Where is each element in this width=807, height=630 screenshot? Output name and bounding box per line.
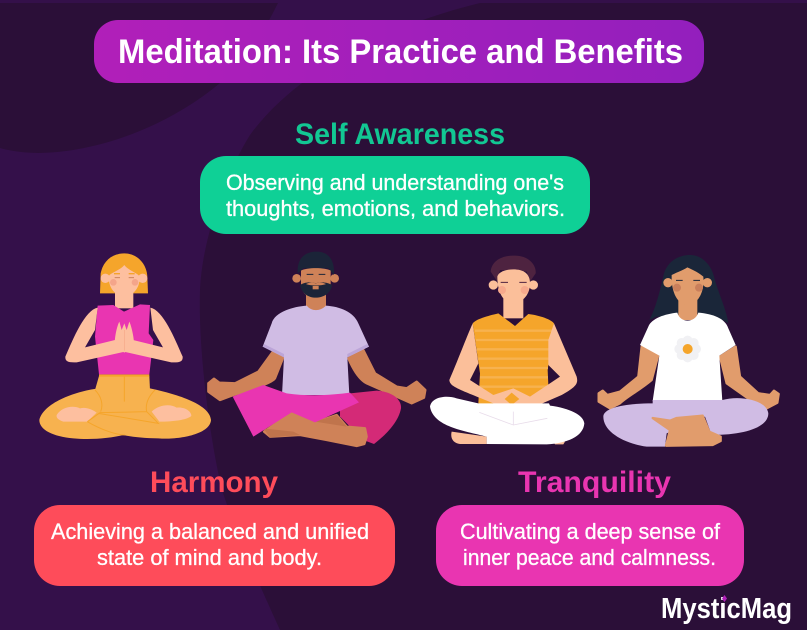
panel: harmony: [34, 466, 395, 586]
text block: harmony description: [34, 505, 395, 586]
heading: harmony: Harmony: [150, 466, 278, 499]
text block: harmony description: Achieving a balanced and unified: [51, 519, 369, 544]
title banner: Meditation: Its Practice and Benefits: [118, 33, 683, 71]
text block: tranquility description: inner peace and calmness.: [463, 545, 716, 570]
figure: dark-haired woman in white flower shirt: [599, 255, 779, 447]
panel: tranquility: [436, 466, 744, 586]
text block: tranquility description: [436, 505, 744, 586]
text block: self awareness description: [200, 156, 590, 234]
figure: man in orange striped vest: [430, 256, 584, 444]
text block: self awareness description: thoughts, emotions, and behaviors.: [226, 196, 565, 221]
panel: self awareness: [200, 118, 590, 234]
text block: harmony description: state of mind and body.: [97, 545, 322, 570]
figure: blonde woman with palms together: [39, 253, 211, 439]
title banner: [94, 20, 704, 83]
heading: self awareness: Self Awareness: [295, 118, 505, 151]
text block: tranquility description: Cultivating a deep sense of: [460, 519, 721, 544]
text block: self awareness description: Observing and understanding one's: [226, 170, 564, 195]
heading: tranquility: Tranquility: [518, 466, 671, 499]
logo: MysticMag: MysticMag: [661, 593, 792, 625]
figure: bearded man in lavender shirt: [208, 252, 425, 446]
